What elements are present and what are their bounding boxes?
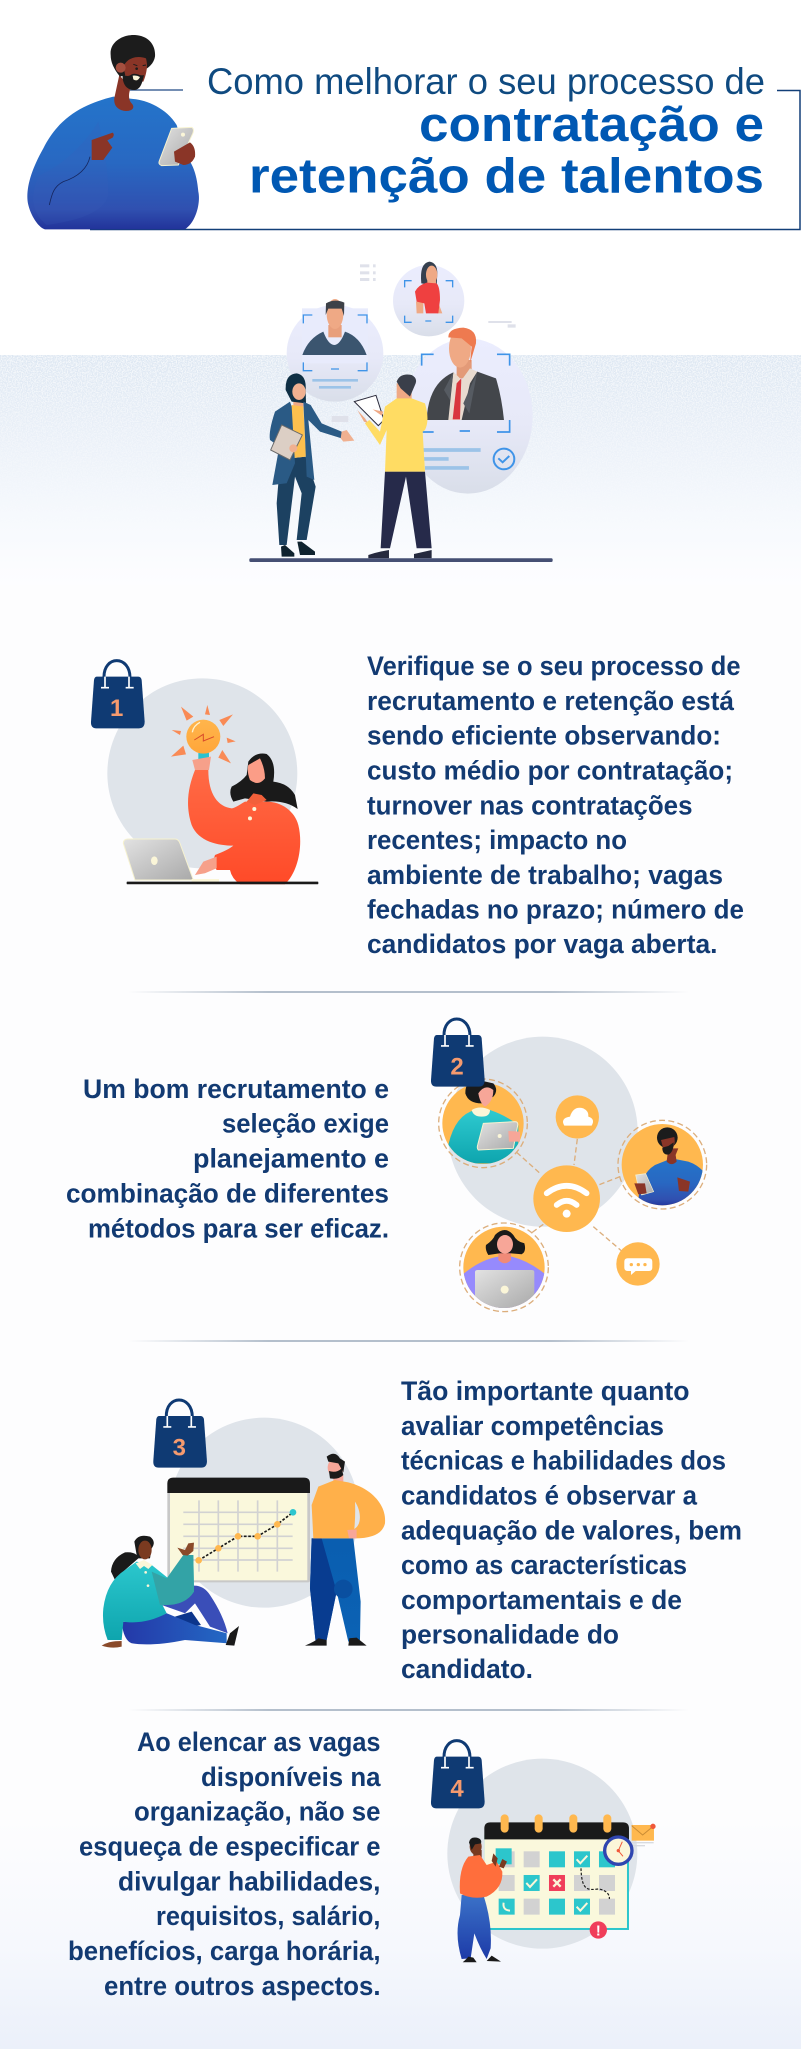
text 4: esqueça de especificar e [79, 1832, 380, 1862]
clock icon [605, 1837, 632, 1864]
decorative data marks [332, 264, 516, 422]
text 1: sendo eficiente observando: [367, 720, 721, 750]
text 3: candidato. [401, 1654, 533, 1684]
avatar: woman with tablet [439, 1079, 527, 1168]
badge: number 4 [431, 1741, 485, 1808]
header frame lines [90, 90, 800, 230]
panel 3 [102, 1376, 742, 1684]
text 4: divulgar habilidades, [118, 1866, 380, 1896]
title: contratação e [419, 98, 764, 152]
candidate bubble: man in suit [403, 328, 533, 494]
badge: number 2: 2 [450, 1053, 464, 1080]
node: wifi [533, 1165, 600, 1232]
text 1: recentes; impacto no [367, 825, 627, 855]
text 1: turnover nas contratações [367, 790, 692, 820]
sitting woman [102, 1536, 239, 1648]
text 3: avaliar competências [401, 1411, 664, 1441]
text 1: candidatos por vaga aberta. [367, 929, 718, 959]
text 3: técnicas e habilidades dos [401, 1446, 726, 1476]
text 1: recrutamento e retenção está [367, 686, 734, 716]
illustration: recruitment scene [249, 262, 553, 562]
panel 1 [91, 651, 744, 959]
title: retenção de talentos [249, 150, 764, 204]
text 2: combinação de diferentes [66, 1178, 389, 1208]
node: cloud [556, 1095, 599, 1139]
illustration: man with calendar [447, 1759, 656, 1962]
text 4: entre outros aspectos. [104, 1971, 380, 2001]
node: chat [616, 1242, 660, 1286]
text 3: como as características [401, 1550, 687, 1580]
badge: number 1 [91, 661, 145, 728]
floor line [249, 558, 553, 562]
mail icon [632, 1824, 656, 1846]
text 4: disponíveis na [201, 1762, 381, 1792]
illustration: man with phone [27, 35, 199, 229]
badge: number 3: 3 [173, 1434, 186, 1461]
alert icon [590, 1921, 607, 1939]
badge: number 4: 4 [450, 1776, 464, 1803]
text 1 [367, 651, 744, 959]
text 3: personalidade do [401, 1620, 619, 1650]
text 1: fechadas no prazo; número de [367, 894, 744, 924]
calendar [484, 1814, 629, 1930]
text 3: comportamentais e de [401, 1585, 682, 1615]
panel 4 [68, 1727, 656, 2001]
text 4: organização, não se [134, 1796, 380, 1826]
alert icon: ! [596, 1923, 601, 1939]
illustration: woman with idea bulb [107, 678, 318, 884]
text 1: ambiente de trabalho; vagas [367, 860, 723, 890]
avatar: woman with laptop [458, 1223, 550, 1312]
badge: number 2 [431, 1019, 485, 1087]
text 4: Ao elencar as vagas [137, 1727, 380, 1757]
text 4: requisitos, salário, [156, 1901, 380, 1931]
text 2: métodos para ser eficaz. [88, 1214, 389, 1244]
man with clipboard [354, 375, 432, 558]
text 3 [401, 1376, 742, 1684]
illustration: connected people network [439, 1037, 707, 1312]
woman presenting [270, 373, 354, 557]
title [207, 61, 765, 204]
standing man [305, 1454, 385, 1646]
candidate bubble: woman [393, 262, 464, 336]
text 2: seleção exige [222, 1108, 389, 1138]
avatar: man with phone [618, 1120, 707, 1209]
text 2: Um bom recrutamento e [83, 1074, 389, 1104]
illustration: team reviewing growth chart [102, 1418, 385, 1648]
text 3: Tão importante quanto [401, 1376, 690, 1406]
panel 2 [66, 1019, 707, 1312]
text 1: Verifique se o seu processo de [367, 651, 740, 681]
badge: number 3 [153, 1400, 207, 1468]
text 4: benefícios, carga horária, [68, 1936, 380, 1966]
candidate bubble: man [287, 299, 383, 402]
man [458, 1838, 507, 1962]
text 2 [66, 1074, 389, 1244]
title: Como melhorar o seu processo de [207, 61, 765, 102]
text 2: planejamento e [193, 1144, 389, 1174]
badge: number 1: 1 [110, 695, 123, 722]
chart board [167, 1478, 310, 1582]
text 4 [68, 1727, 381, 2001]
text 3: adequação de valores, bem [401, 1516, 742, 1546]
text 1: custo médio por contratação; [367, 756, 733, 786]
text 3: candidatos é observar a [401, 1480, 697, 1510]
